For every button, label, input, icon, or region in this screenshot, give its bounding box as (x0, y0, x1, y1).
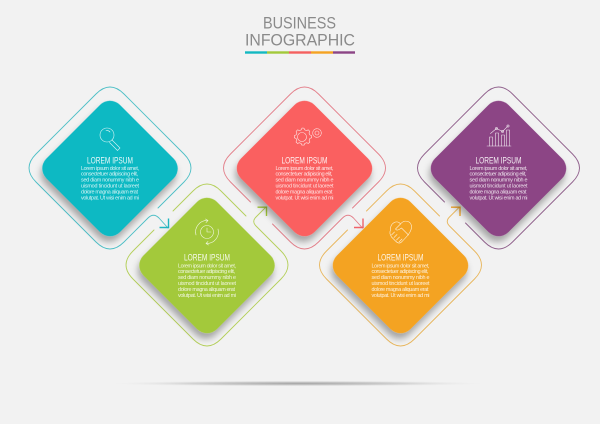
body text: uismod tincidunt ut laoreet (470, 184, 528, 190)
body text: uismod tincidunt ut laoreet (178, 281, 236, 287)
body text: sed diam nonummy nibh e (178, 275, 236, 281)
outline with arrow (29, 87, 191, 249)
panel: red step 3 (224, 87, 386, 249)
panel: purple step 5 (418, 87, 580, 249)
body text: sed diam nonummy nibh e (276, 178, 334, 184)
outline top segment (224, 87, 386, 208)
body text: Lorem ipsum dolor sit amet, (178, 263, 236, 269)
body text: sed diam nonummy nibh e (470, 178, 528, 184)
diamond card (425, 95, 572, 242)
body text (372, 263, 430, 299)
body text: uismod tincidunt ut laoreet (276, 184, 334, 190)
outline top segment (366, 184, 440, 216)
diamond card (133, 192, 281, 339)
body text: dolore magna aliquam erat (372, 287, 429, 293)
body text: dolore magna aliquam erat (81, 189, 138, 195)
body text: uismod tincidunt ut laoreet (372, 281, 430, 287)
diamond card (327, 192, 474, 339)
body text: Lorem ipsum dolor sit amet, (470, 166, 528, 172)
body text (470, 166, 528, 201)
body text: consectetuer adipiscing elit, (178, 269, 236, 275)
body text: dolore magna aliquam erat (178, 287, 236, 293)
title: BUSINESS (263, 14, 336, 32)
arrow head (451, 207, 460, 216)
icon: clock with cycle arrows (196, 219, 218, 245)
body text: volutpat. Ut wisi enim ad mi (81, 195, 139, 201)
body text: consectetuer adipiscing elit, (81, 172, 138, 178)
arrow head (354, 218, 363, 228)
body text: sed diam nonummy nibh e (81, 178, 139, 184)
body text: volutpat. Ut wisi enim ad mi (178, 293, 236, 299)
body text: volutpat. Ut wisi enim ad mi (372, 293, 430, 299)
heading: LOREM IPSUM (184, 252, 230, 262)
icon: gears (294, 128, 321, 145)
panel: orange step 4 (320, 184, 482, 346)
icon: heart handshake (390, 221, 412, 243)
body text: Lorem ipsum dolor sit amet, (81, 166, 139, 172)
icon: bar chart (487, 125, 511, 146)
diamond card (36, 95, 184, 242)
title (245, 14, 355, 50)
body text: volutpat. Ut wisi enim ad mi (276, 195, 334, 201)
diamond card (231, 95, 378, 242)
outline with arrow (126, 207, 288, 346)
body text: dolore magna aliquam erat (470, 189, 527, 195)
heading: LOREM IPSUM (476, 155, 522, 165)
panel: teal step 1 (29, 87, 191, 249)
outline with arrow (272, 215, 362, 249)
heading: LOREM IPSUM (378, 252, 424, 262)
outline with arrow (320, 207, 482, 346)
body text: uismod tincidunt ut laoreet (81, 184, 140, 190)
body text: Lorem ipsum dolor sit amet, (276, 166, 334, 172)
body text (178, 263, 236, 299)
title: INFOGRAPHIC (245, 32, 355, 50)
body text: sed diam nonummy nibh e (372, 275, 430, 281)
body text: consectetuer adipiscing elit, (372, 269, 429, 275)
body text: consectetuer adipiscing elit, (470, 172, 527, 178)
panel: green step 2 (126, 184, 288, 346)
outline (418, 87, 580, 249)
body text (276, 166, 334, 201)
title colour rule (245, 51, 355, 54)
outline top segment (173, 184, 246, 216)
body text: volutpat. Ut wisi enim ad mi (470, 195, 528, 201)
arrow head (160, 218, 168, 228)
heading: LOREM IPSUM (282, 155, 328, 165)
heading: LOREM IPSUM (87, 155, 133, 165)
body text: consectetuer adipiscing elit, (276, 172, 333, 178)
icon: magnifier (100, 128, 120, 150)
body text: Lorem ipsum dolor sit amet, (372, 263, 430, 269)
body text (81, 166, 140, 201)
floor shadow (103, 380, 493, 386)
arrow head (258, 207, 266, 216)
body text: dolore magna aliquam erat (276, 189, 333, 195)
